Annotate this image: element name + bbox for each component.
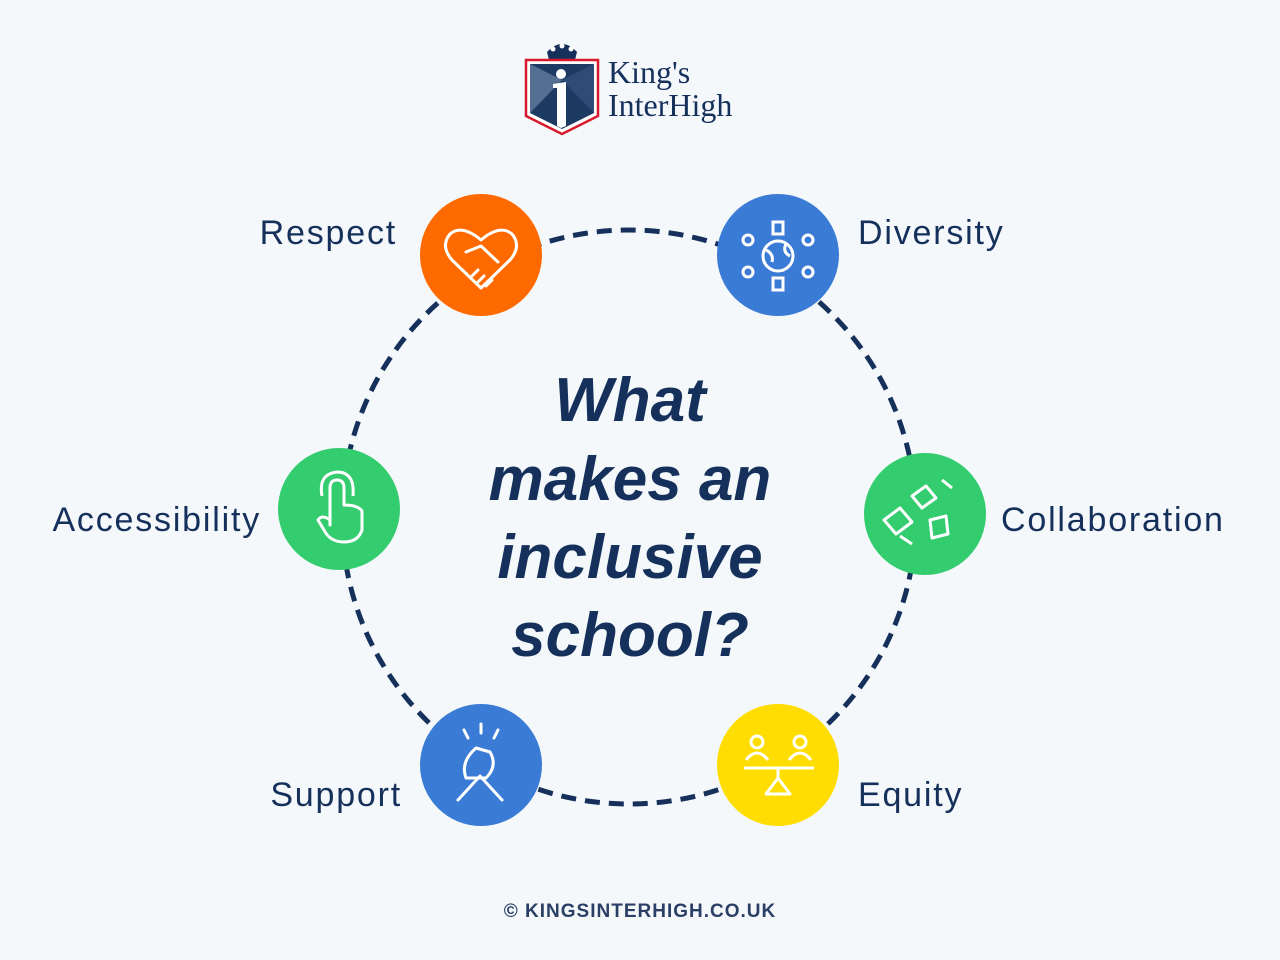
- title: makes an: [489, 445, 771, 514]
- icon: shield: [526, 60, 598, 134]
- node: collaboration: Collaboration: [1001, 501, 1225, 539]
- dashed ring: [342, 230, 916, 804]
- icon: balance scale people: [744, 736, 814, 794]
- node: equity: [717, 704, 963, 826]
- logo: [526, 44, 732, 134]
- title: What: [554, 366, 708, 435]
- title: inclusive: [497, 523, 763, 592]
- icon: crown: [547, 44, 577, 60]
- node: accessibility: [52, 448, 400, 570]
- node: collaboration: [864, 453, 1225, 575]
- node: support: [270, 704, 542, 826]
- node: respect: [260, 194, 542, 316]
- icon: pointing hand: [318, 472, 362, 542]
- node: accessibility: Accessibility: [52, 501, 261, 539]
- node: diversity: Diversity: [858, 214, 1005, 252]
- node: equity: Equity: [858, 776, 963, 814]
- icon: globe with people: [743, 222, 813, 290]
- icon: handshake heart: [445, 230, 517, 288]
- title: school?: [511, 601, 749, 670]
- node: diversity: [717, 194, 1005, 316]
- logo text: King's: [608, 54, 690, 90]
- logo: InterHigh: [608, 87, 732, 123]
- node: support: Support: [270, 776, 402, 814]
- icon: puzzle hands: [884, 480, 952, 544]
- icon: clasped hands: [458, 724, 502, 800]
- title: [489, 366, 771, 670]
- node: respect: Respect: [260, 214, 397, 252]
- footer: © KINGSINTERHIGH.CO.UK: [504, 901, 776, 922]
